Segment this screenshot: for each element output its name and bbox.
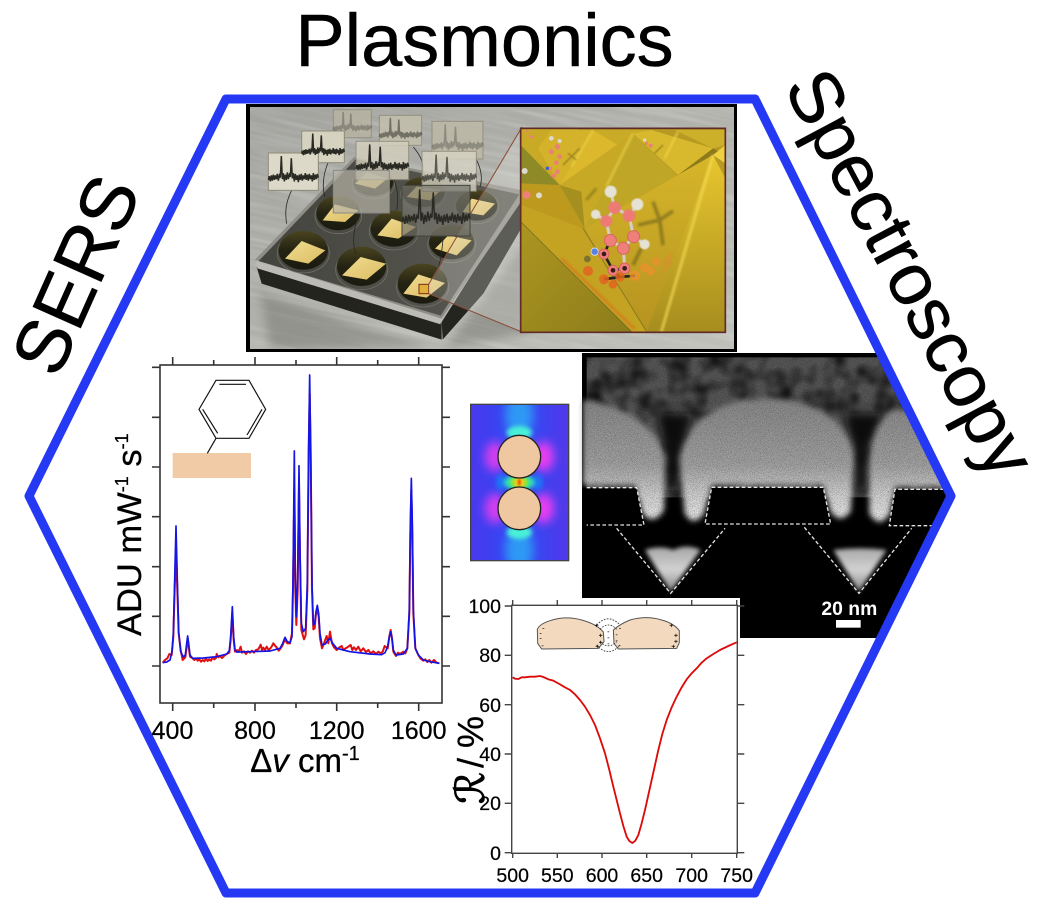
inset: coupled nanoparticles with charges: + xyxy=(599,639,603,646)
inset: coupled nanoparticles with charges: - xyxy=(540,635,542,642)
x axis tick labels: 400 xyxy=(152,717,193,745)
x tick labels: 750 xyxy=(720,865,753,887)
inset: coupled nanoparticles with charges: - xyxy=(607,634,609,641)
reflectance curve xyxy=(513,642,737,843)
inset: coupled nanoparticles with charges: + xyxy=(674,633,678,640)
x tick labels: 700 xyxy=(675,865,708,887)
inset: coupled nanoparticles with charges: - xyxy=(607,628,609,635)
large pyramid xyxy=(560,133,633,228)
tray top xyxy=(255,157,522,319)
title: Plasmonics: Plasmonics xyxy=(295,0,674,82)
gold domes xyxy=(583,398,967,522)
gold in V grooves xyxy=(645,547,887,592)
spectrum frame and ticks xyxy=(152,357,450,711)
x tick labels xyxy=(496,865,753,887)
panel: SERS substrate illustration xyxy=(246,104,737,662)
x tick labels: 600 xyxy=(586,865,618,887)
gold nanoparticle dimer xyxy=(498,435,541,530)
dashed outlines xyxy=(587,487,950,593)
inset: coupled nanoparticles with charges: + xyxy=(669,623,673,630)
reflectance frame and ticks xyxy=(505,600,744,858)
icon: thiophenol molecule on gold xyxy=(173,380,266,478)
y axis title: slash percent: / % xyxy=(450,716,491,768)
inset: gold pyramids with molecule xyxy=(521,128,725,332)
connector curves xyxy=(286,147,481,277)
y axis title: script R: ℛ xyxy=(448,772,494,804)
x axis tick labels: 1600 xyxy=(391,717,447,745)
panel: electric field map of dimer xyxy=(471,392,569,573)
scale bar: 20 nm xyxy=(821,599,877,620)
zoom cone xyxy=(429,127,522,332)
inset: coupled nanoparticles with charges: + xyxy=(674,639,678,646)
x tick labels: 500 xyxy=(496,865,529,887)
top row pyramids xyxy=(521,128,578,185)
inset: coupled nanoparticles with charges: + xyxy=(595,644,599,651)
y tick labels: 100 xyxy=(468,596,501,618)
x axis tick labels xyxy=(152,717,447,745)
spectrum traces xyxy=(163,375,439,663)
y tick labels xyxy=(468,596,501,865)
title: SERS: SERS xyxy=(0,163,157,387)
facet highlights xyxy=(571,130,713,332)
x axis tick labels: 800 xyxy=(234,717,276,745)
inset: coupled nanoparticles with charges: + xyxy=(599,633,603,640)
panel: SERS spectrum chart xyxy=(111,357,450,779)
inset: coupled nanoparticles with charges: + xyxy=(595,623,599,630)
hexagon outline xyxy=(29,99,951,893)
large foreground faces xyxy=(585,155,713,274)
inset: coupled nanoparticles with charges: - xyxy=(607,640,609,647)
inset: coupled nanoparticles with charges: - xyxy=(618,642,620,649)
main molecule shadow xyxy=(586,188,673,265)
inset: coupled nanoparticles with charges: - xyxy=(616,632,618,639)
main molecule bonds xyxy=(598,196,642,263)
y axis title: -1 xyxy=(112,433,132,449)
y tick labels: 20 xyxy=(479,793,501,815)
y tick labels: 40 xyxy=(479,744,501,766)
panel: reflectance chart xyxy=(448,596,753,887)
inset: coupled nanoparticles with charges: - xyxy=(542,642,544,649)
y axis title: ADU mW xyxy=(111,492,149,636)
y tick labels: 0 xyxy=(490,843,501,865)
x tick labels: 550 xyxy=(541,865,574,887)
inset: coupled nanoparticles with charges: - xyxy=(616,638,618,645)
x tick labels: 650 xyxy=(630,865,663,887)
y axis title: s xyxy=(111,449,149,476)
x axis title: -1 xyxy=(342,743,360,765)
main molecule atoms xyxy=(591,186,650,249)
panel: electron microscopy cross-section xyxy=(582,353,983,638)
trenches xyxy=(584,488,643,520)
x axis title: Δv cm xyxy=(250,742,342,779)
dark gaps above nanostructure xyxy=(657,413,883,490)
inset: coupled nanoparticles with charges: - xyxy=(619,625,621,632)
y tick labels: 80 xyxy=(479,645,501,667)
inset: coupled nanoparticles with charges xyxy=(537,618,679,652)
spectra boxes xyxy=(268,110,483,236)
inset: coupled nanoparticles with charges: - xyxy=(542,625,544,632)
x axis tick labels: 1200 xyxy=(309,717,365,745)
y axis title: -1 xyxy=(112,476,132,492)
inset: coupled nanoparticles with charges: + xyxy=(671,644,675,651)
y tick labels: 60 xyxy=(479,695,501,717)
inset: coupled nanoparticles with charges: - xyxy=(540,630,542,637)
small molecules xyxy=(522,130,663,199)
wells xyxy=(277,168,499,307)
tray sides xyxy=(257,267,442,340)
